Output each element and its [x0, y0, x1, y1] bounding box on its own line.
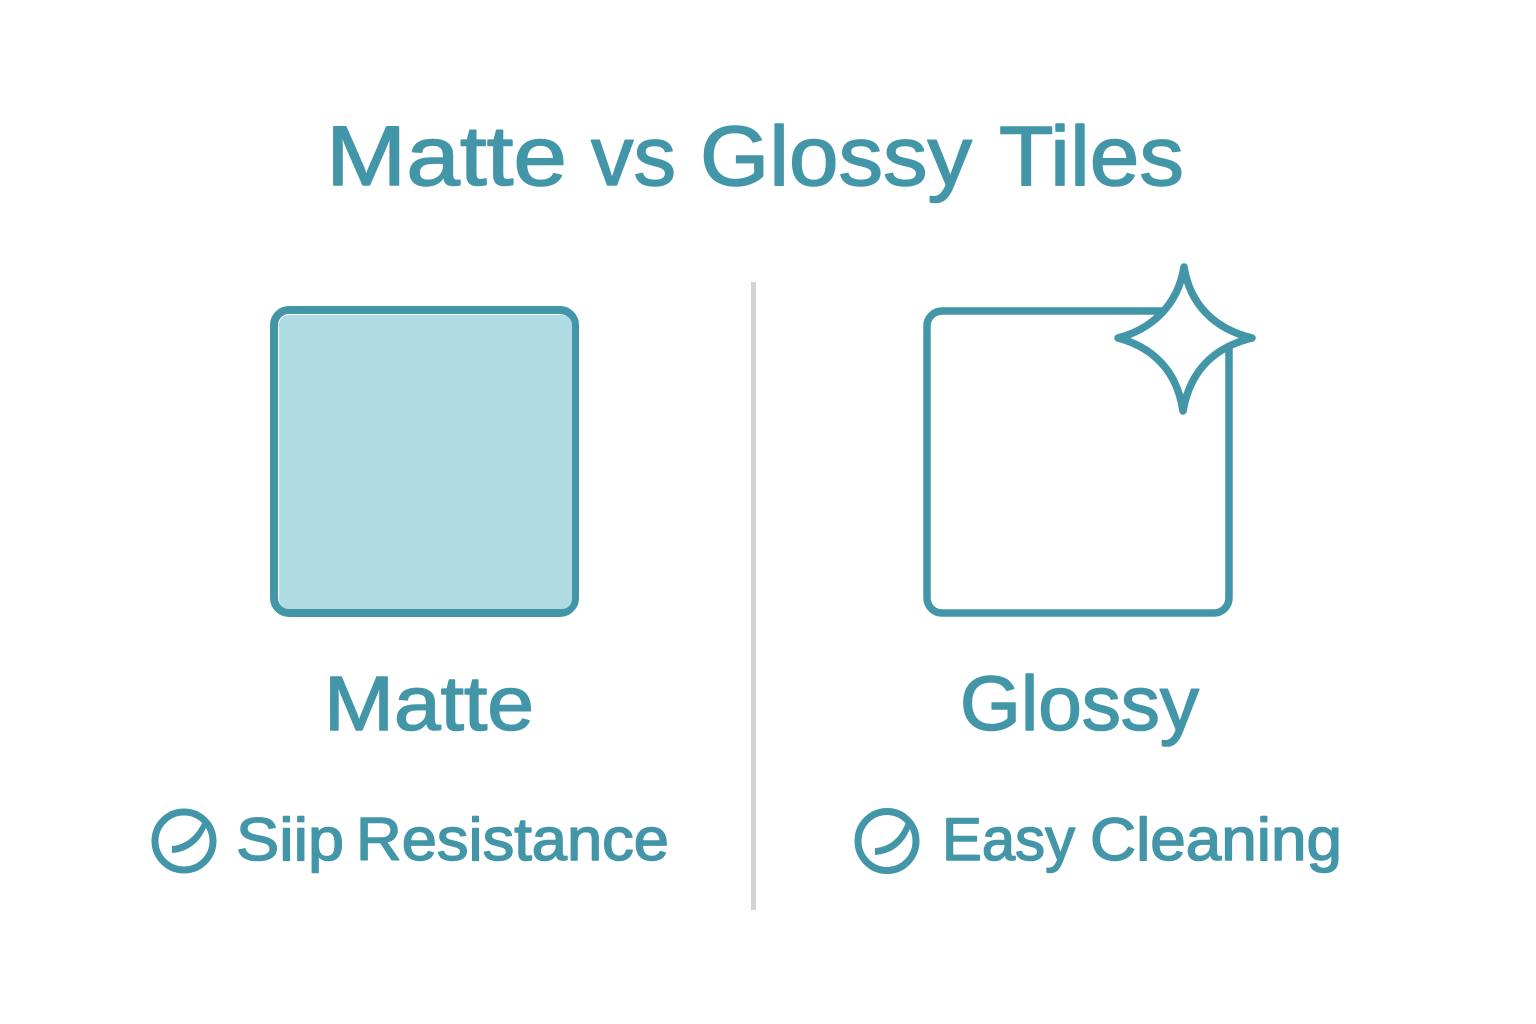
icon: glossy tile: [927, 267, 1252, 613]
benefit: easy cleaning: [858, 806, 1342, 873]
icon: matte tile: [274, 310, 575, 613]
icon: sparkle: [1118, 267, 1252, 411]
benefit label: Siip: [236, 806, 344, 873]
heading: glossy: Glossy: [960, 661, 1200, 747]
benefit label: Easy: [942, 806, 1075, 873]
title: Tiles: [999, 109, 1184, 203]
panel: matte: [155, 310, 669, 873]
benefit label: Resistance: [356, 806, 669, 873]
title: Matte: [326, 109, 567, 203]
title: Glossy: [700, 109, 972, 203]
title: vs: [591, 109, 676, 203]
center divider: [751, 282, 756, 910]
icon: check badge: [858, 812, 916, 870]
heading: matte: Matte: [324, 661, 534, 747]
panel: glossy: [858, 267, 1342, 873]
icon: check badge: [155, 812, 213, 870]
benefit: slip resistance: [155, 806, 669, 873]
benefit label: Cleaning: [1090, 806, 1342, 873]
